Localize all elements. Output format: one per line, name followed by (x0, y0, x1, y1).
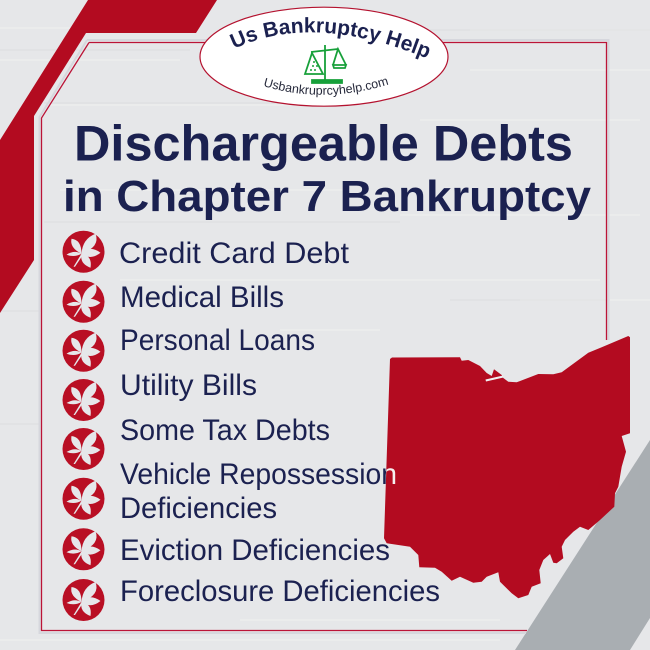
content frame (40, 40, 608, 633)
list bullets (62, 231, 104, 621)
bullet 4 (62, 379, 104, 421)
bullet 2 (62, 281, 104, 323)
logo oval (200, 7, 448, 106)
title (63, 116, 592, 221)
bullet 8 (62, 579, 104, 621)
item: utility bills: Utility Bills (120, 369, 257, 402)
scale pan dots (310, 62, 318, 70)
grey diagonal band bottom right (515, 440, 650, 650)
item: vehicle repossession deficiencies: Deficiencies (120, 492, 277, 525)
item: eviction deficiencies: Eviction Deficiencies (120, 534, 390, 567)
map of Ohio (384, 336, 630, 598)
title: in Chapter 7 Bankruptcy (63, 172, 592, 221)
item: vehicle repossession deficiencies (120, 458, 397, 525)
item: personal loans: Personal Loans (120, 324, 315, 357)
logo name: Us Bankruptcy Help (229, 17, 430, 60)
letter overlap on map: Vehicle Repossession (120, 458, 397, 491)
red diagonal band top left (0, 0, 217, 313)
bullet 3 (62, 330, 104, 372)
debt list (62, 231, 440, 621)
icon: scales of justice (305, 45, 346, 83)
item: credit card debt: Credit Card Debt (119, 237, 350, 270)
item: foreclosure deficiencies: Foreclosure Deficiencies (120, 575, 440, 608)
item: vehicle repossession deficiencies: Vehicle Repossession (120, 458, 397, 491)
bullet 6 (62, 478, 104, 520)
bullet 7 (62, 528, 104, 570)
item: some tax debts: Some Tax Debts (120, 414, 330, 447)
lake erie island sliver (486, 376, 504, 382)
bullet 1 (62, 231, 104, 273)
title: Dischargeable Debts (74, 116, 573, 172)
bullet 5 (62, 428, 104, 470)
item: medical bills: Medical Bills (120, 281, 284, 314)
logo url: Usbankruprcyhelp.com (264, 78, 388, 98)
logo badge (199, 6, 449, 107)
